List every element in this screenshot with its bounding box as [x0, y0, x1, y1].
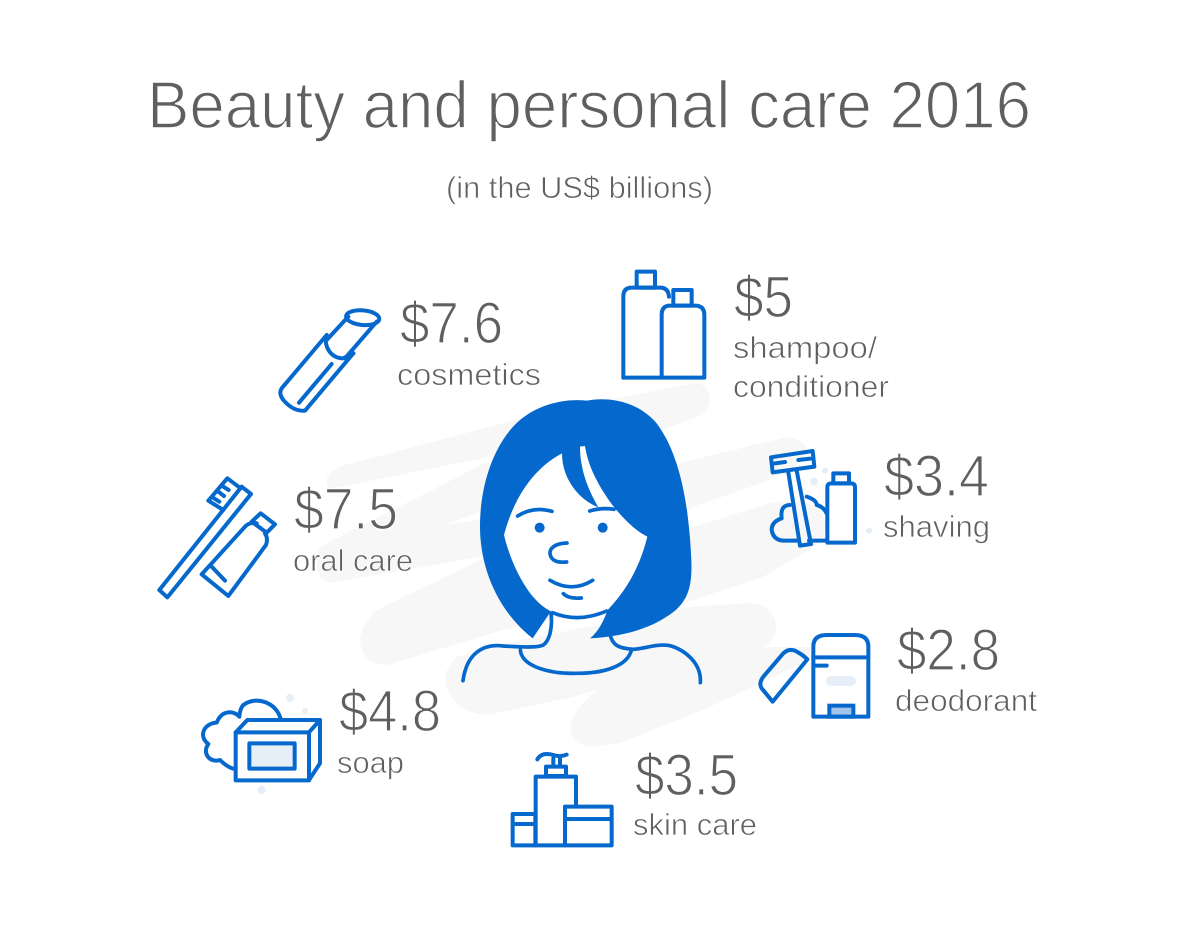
shampoo label — [733, 330, 889, 404]
cosmetics label: cosmetics — [397, 357, 541, 392]
woman illustration — [463, 399, 700, 683]
soap label: soap — [337, 745, 404, 780]
face — [504, 446, 647, 617]
deodorant icon — [760, 635, 868, 717]
soap value: $4.8 — [339, 679, 441, 744]
deodorant label: deodorant — [895, 683, 1037, 718]
deodorant value: $2.8 — [897, 618, 1000, 683]
shaving label: shaving — [883, 509, 990, 544]
oral care label: oral care — [293, 543, 413, 578]
background brush strokes — [317, 383, 826, 747]
neck and shoulders — [463, 613, 551, 681]
subtitle: (in the US$ billions) — [446, 170, 713, 205]
shampoo label: conditioner — [733, 369, 889, 404]
cosmetics: lipstick icon — [280, 309, 380, 411]
shampoo icon — [623, 272, 704, 378]
oral care value: $7.5 — [294, 477, 398, 542]
skin care value: $3.5 — [635, 743, 738, 808]
cosmetics value: $7.6 — [400, 291, 503, 356]
shampoo label: shampoo/ — [733, 330, 877, 365]
skin care label: skin care — [633, 807, 757, 842]
soap icon — [203, 694, 320, 794]
hair — [480, 399, 691, 638]
title: Beauty and personal care 2016 — [147, 68, 1031, 143]
shaving value: $3.4 — [884, 444, 989, 509]
skin care icon — [513, 754, 612, 845]
facial features — [463, 509, 700, 683]
oral care icon — [159, 478, 275, 597]
shampoo value: $5 — [734, 265, 793, 330]
shaving icon — [771, 451, 872, 546]
